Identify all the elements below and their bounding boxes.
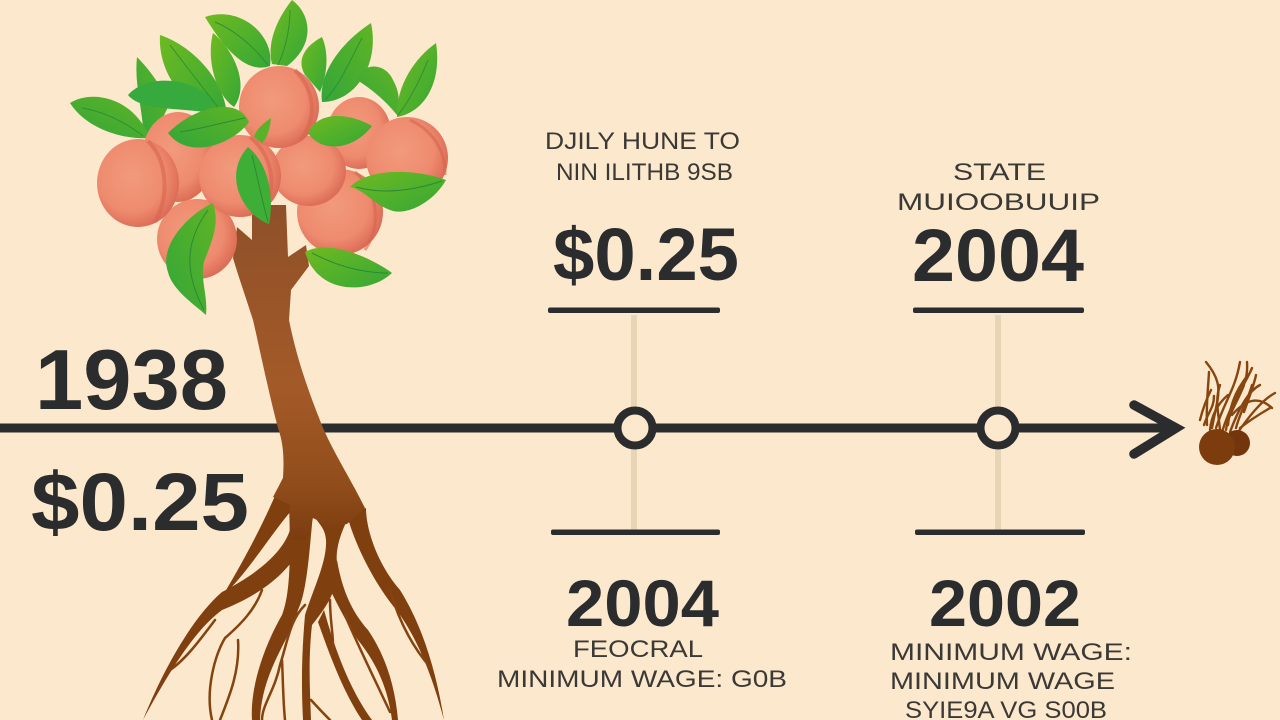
caption line 1: MINIMUM WAGE:: [890, 639, 1132, 666]
peach: back left: [142, 112, 214, 202]
thin root strands: [170, 590, 431, 720]
peach tree illustration: [70, 0, 448, 720]
caption line 2: MUIOOBUUIP: [897, 189, 1100, 216]
timeline axis with arrow: [0, 405, 1176, 454]
milestone marker 2: [980, 410, 1016, 446]
leaf: [205, 14, 270, 68]
year 2002: 2002: [929, 566, 1081, 640]
roots: [143, 478, 444, 720]
leaf: [128, 81, 215, 112]
leaf: [211, 33, 241, 107]
leaf: [160, 35, 226, 114]
peach: top: [239, 66, 319, 148]
leaf: [136, 57, 170, 138]
trunk: [233, 205, 365, 540]
vertical connector: 1st milestone: [631, 315, 637, 530]
leaf: [397, 43, 437, 117]
leaf: [236, 147, 271, 224]
caption line 2: NIN ILITHB 9SB: [556, 159, 733, 186]
root bulb small: [1224, 430, 1250, 456]
arrow head: [1134, 405, 1176, 454]
leaf: [166, 203, 216, 315]
peach: bottom right: [297, 169, 383, 255]
leaf: [305, 248, 392, 287]
root ball at arrow end: [1199, 362, 1275, 465]
vertical connector: 2nd milestone: [995, 315, 1001, 530]
caption line 2: MINIMUM WAGE: [890, 668, 1115, 695]
leaf: [254, 118, 271, 143]
leaf: [168, 107, 249, 148]
caption minimum wage: MINIMUM WAGE: G0B: [497, 666, 787, 693]
root bulb large: [1199, 429, 1235, 465]
caption STATE: STATE: [953, 159, 1046, 186]
foliage over fruit: [166, 107, 446, 315]
leaf: [301, 37, 326, 92]
text block: upper milestone 2: [897, 159, 1100, 297]
leaf: [271, 0, 308, 66]
value $0.25: $0.25: [553, 213, 739, 296]
caption line 1: DJILY HUNE TO: [545, 128, 740, 155]
wage label $0.25 left: $0.25: [31, 457, 249, 548]
peach: center: [199, 135, 281, 217]
midribs over fruit: [180, 118, 442, 310]
text block: upper milestone 1: [545, 128, 740, 296]
midribs: [82, 10, 428, 136]
axis line: [0, 424, 1172, 432]
leaf: [322, 23, 373, 102]
peach: right center: [272, 136, 346, 206]
year 2004: 2004: [566, 566, 719, 640]
leaf: [308, 116, 372, 146]
caption FEOCRAL: FEOCRAL: [573, 636, 703, 663]
leaf: [350, 172, 446, 212]
leaf: [357, 66, 399, 115]
divider bars: [548, 308, 1085, 535]
foliage behind fruit: [70, 0, 437, 138]
year 2004: 2004: [912, 214, 1084, 297]
milestone marker 1: [618, 410, 652, 446]
leaf: [70, 97, 150, 138]
peach: back right: [327, 97, 391, 169]
text block: lower milestone 2: [890, 566, 1132, 720]
peach: far right: [366, 117, 448, 199]
year label 1938: 1938: [35, 333, 228, 428]
text block: lower milestone 1: [497, 566, 787, 693]
peach: left large: [97, 139, 179, 227]
root hairs: [1200, 362, 1275, 435]
peach: bottom left: [157, 199, 237, 279]
